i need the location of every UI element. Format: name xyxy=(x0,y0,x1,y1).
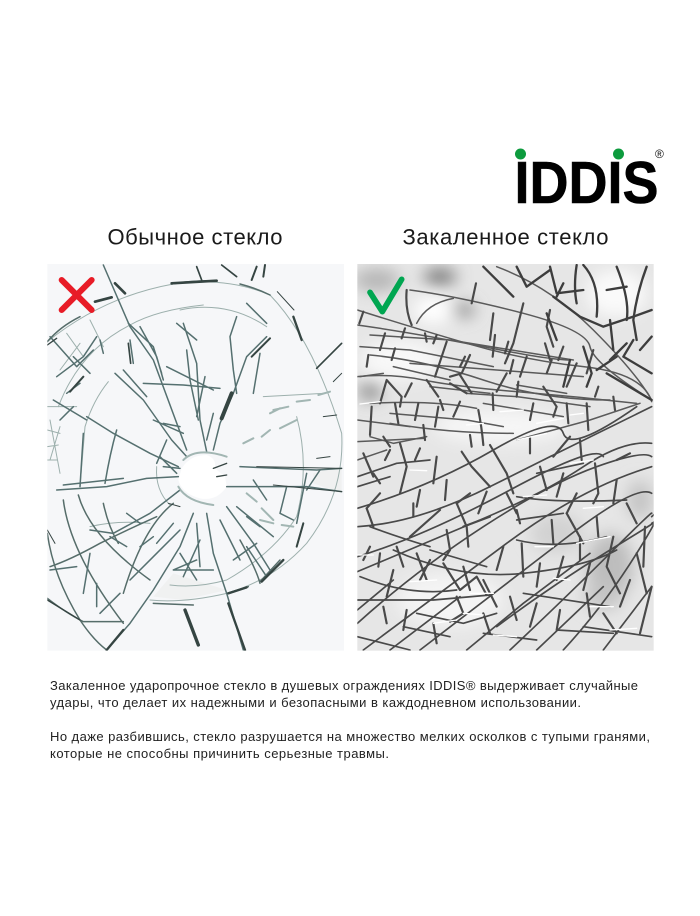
text block: description xyxy=(50,678,650,761)
soft background shading xyxy=(353,268,653,627)
icon: green check mark xyxy=(370,279,402,312)
lower long cracks xyxy=(357,407,658,650)
heading: ordinary glass: Обычное стекло xyxy=(108,224,282,250)
logo: IDDIS: ® xyxy=(655,147,664,161)
upper long cracks xyxy=(357,267,652,460)
concentric cracks xyxy=(47,282,342,601)
panel: ordinary broken glass photo xyxy=(47,264,344,651)
text block: description: Закаленное ударопрочное стекло в душевых ограждениях IDDIS® выдерживает случайные xyxy=(50,678,638,693)
short cross cracks xyxy=(359,283,652,643)
dark glass splinters xyxy=(47,265,342,650)
light debris near the impact xyxy=(178,392,330,527)
text block: description: которые не способны причинить серьезные травмы. xyxy=(50,746,389,761)
text block: description: Но даже разбившись, стекло разрушается на множество мелких осколков с тупыми гранями, xyxy=(50,729,650,744)
radial cracks xyxy=(50,265,342,650)
white edge highlights xyxy=(357,402,637,637)
heading: tempered glass: Закаленное стекло xyxy=(402,224,608,250)
upper right web xyxy=(483,265,652,400)
icon: red cross xyxy=(62,280,92,310)
pale shards around the impact xyxy=(153,467,342,600)
panel: tempered broken glass photo xyxy=(353,264,658,651)
logo: IDDIS: IDDIS xyxy=(514,150,658,216)
text block: description: удары, что делает их надежными и безопасными в каждодневном использовании. xyxy=(50,695,581,710)
